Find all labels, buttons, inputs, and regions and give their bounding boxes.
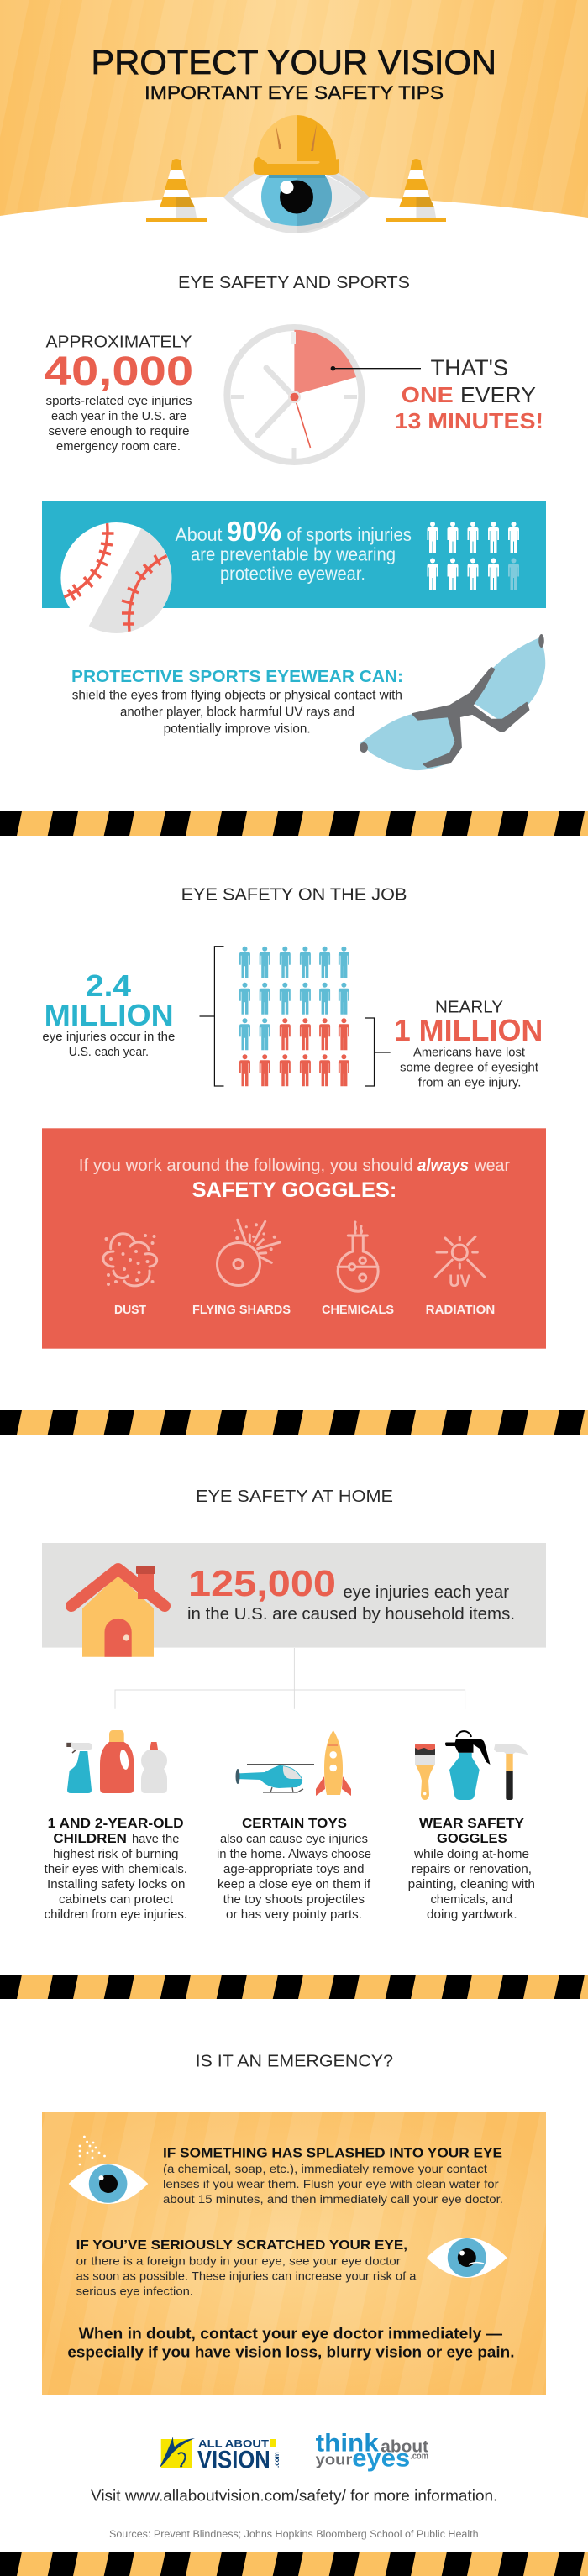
text: children: have the (132, 1833, 179, 1846)
text: about 90 percent: of sports injuries (287, 524, 412, 545)
text: splashed into eye: lenses if you wear them. Flush your eye with clean water for (163, 2177, 499, 2190)
logo: think about your eyes: eyes (352, 2445, 410, 2473)
text: goggles: repairs or renovation, (412, 1863, 532, 1876)
heading: EYE SAFETY AND SPORTS (178, 274, 410, 292)
icon: left traffic cone (146, 159, 207, 222)
bracket: right (365, 1018, 391, 1086)
text: scratched eye: as soon as possible. These injuries can increase your risk of a (76, 2269, 417, 2282)
stat: 1 million: NEARLY (435, 999, 503, 1017)
heading: SAFETY GOGGLES: (192, 1178, 396, 1202)
callout: one every 13 minutes: ONE (402, 382, 454, 407)
text: protective sports eyewear: another player, block harmful UV rays and (120, 706, 354, 720)
stat: 2.4 million: MILLION (45, 998, 174, 1032)
hazard stripe divider (0, 1410, 588, 1435)
text: goggles: painting, cleaning with (408, 1878, 535, 1891)
text: children: highest risk of burning (53, 1848, 178, 1861)
stat: 2.4 million: U.S. each year. (69, 1046, 149, 1059)
column: children (45, 1730, 187, 1922)
panel: safety goggles (42, 1128, 546, 1349)
labels: hazards: FLYING SHARDS (192, 1304, 291, 1317)
heading: IS IT AN EMERGENCY? (196, 2053, 393, 2071)
stat: 125,000: 125,000 (188, 1563, 336, 1604)
text: when in doubt (67, 2325, 514, 2360)
stat: 125,000: eye injuries each year (343, 1583, 509, 1602)
panel: 90 percent preventable (42, 501, 546, 635)
stat: 2.4 million (42, 968, 175, 1059)
text: children: their eyes with chemicals. (45, 1863, 187, 1876)
logo: think about your eyes: your (316, 2451, 352, 2468)
icon: spray bottle (445, 1731, 491, 1800)
labels: hazards: RADIATION (426, 1304, 495, 1317)
text: protective sports eyewear: shield the eyes from flying objects or physical contact with (72, 689, 402, 703)
stat: 1 million: from an eye injury. (418, 1076, 521, 1089)
logo: think about your eyes: .com (410, 2451, 428, 2461)
icon: radiation: UV (449, 1272, 470, 1291)
stat: 2.4 million: eye injuries occur in the (42, 1031, 175, 1044)
heading: EYE SAFETY ON THE JOB (181, 885, 407, 904)
icon: paint brush (415, 1744, 435, 1800)
logo: think about your eyes: about (381, 2437, 428, 2456)
column: goggles (408, 1731, 535, 1922)
icon: flying shards (217, 1220, 280, 1285)
logo: all about vision: ALL ABOUT (198, 2437, 270, 2449)
text: protective sports eyewear (71, 667, 403, 737)
icon: dust (103, 1234, 157, 1286)
text: scratched eye: IF YOU’VE SERIOUSLY SCRATCHED YOUR EYE, (76, 2238, 407, 2253)
text: sources: Sources: Prevent Blindness; Johns Hopkins Bloomberg School of Public Health (109, 2530, 479, 2540)
stat: 40,000 injuries: APPROXIMATELY (45, 333, 192, 351)
icon: right traffic cone (386, 159, 446, 222)
stat: 40,000 injuries: 40,000 (45, 349, 193, 394)
callout: one every 13 minutes: 13 MINUTES! (395, 408, 543, 433)
logo: all about vision (160, 2437, 281, 2474)
hazard stripe divider (0, 811, 588, 836)
stat: 1 million: some degree of eyesight (400, 1062, 538, 1075)
text: when in doubt: especially if you have vision loss, blurry vision or eye pain. (67, 2343, 514, 2360)
panel: 125,000 household injuries (42, 1543, 546, 1657)
icon: scratched eye (427, 2238, 507, 2278)
header banner (0, 0, 588, 233)
text: children: children from eye injuries. (45, 1908, 187, 1922)
text: toys: CERTAIN TOYS (242, 1817, 347, 1831)
chart: clock with 13 minute wedge (227, 328, 421, 462)
section: is it an emergency (42, 2053, 546, 2540)
text: splashed into eye (163, 2146, 503, 2206)
text: children: Installing safety locks on (47, 1878, 185, 1891)
icon: eye with hard hat (223, 115, 370, 233)
text: always wear: wear (474, 1157, 510, 1175)
text: children (45, 1817, 187, 1922)
text: scratched eye: serious eye infection. (76, 2284, 193, 2297)
section: eye safety and sports (42, 274, 546, 770)
text: about 90 percent (175, 516, 412, 585)
text: toys: or has very pointy parts. (226, 1908, 362, 1922)
callout: one every 13 minutes: THAT'S (430, 355, 508, 380)
title: PROTECT YOUR VISION (91, 43, 496, 81)
text: scratched eye: or there is a foreign body in your eye, see your eye doctor (76, 2253, 401, 2267)
text: toys: in the home. Always choose (217, 1848, 371, 1861)
text: splashed into eye: IF SOMETHING HAS SPLASHED INTO YOUR EYE (163, 2146, 502, 2160)
icon: baseball (60, 521, 176, 635)
stat: 40,000 injuries: each year in the U.S. are (51, 410, 186, 423)
text: toys: also can cause eye injuries (220, 1833, 368, 1846)
section: eye safety at home (42, 1487, 546, 1922)
labels: hazards (114, 1304, 495, 1317)
logo: think about your eyes (316, 2429, 428, 2473)
pictogram: nine of ten people (427, 522, 519, 590)
text: goggles: WEAR SAFETY (419, 1817, 524, 1831)
text: goggles: GOGGLES (437, 1832, 507, 1846)
text: toys (217, 1817, 371, 1922)
logo: all about vision: VISION (197, 2446, 270, 2474)
stat: 2.4 million: 2.4 (86, 968, 131, 1003)
icon: household cleaning bottles (66, 1730, 167, 1793)
pictogram: people grid (239, 947, 349, 1086)
panel: emergency advice (42, 2112, 546, 2395)
section: eye safety on the job (42, 885, 546, 1349)
connector lines (115, 1648, 465, 1709)
bracket: left (200, 947, 223, 1086)
text: splashed into eye: (a chemical, soap, etc.), immediately remove your contact (163, 2162, 487, 2175)
logo: think about your eyes: think (316, 2429, 379, 2457)
column: toys (217, 1730, 371, 1922)
hazard stripe footer (0, 2552, 588, 2576)
text: children: CHILDREN (53, 1832, 127, 1846)
text: toys: the toy shoots projectiles (223, 1893, 365, 1907)
text: about 90 percent: About (175, 524, 222, 545)
text: children: cabinets can protect (59, 1893, 173, 1907)
text: visit website: Visit www.allaboutvision.com/safety/ for more information. (91, 2487, 497, 2504)
text: toys: age-appropriate toys and (223, 1863, 365, 1876)
text: splashed into eye: about 15 minutes, and then immediately call your eye doctor. (163, 2192, 503, 2206)
stat: 40,000 injuries: severe enough to require (49, 425, 190, 438)
icon: eye with splash (69, 2136, 148, 2204)
heading: EYE SAFETY AT HOME (196, 1487, 393, 1506)
logo: all about vision: .com (273, 2452, 281, 2468)
callout: one every 13 minutes: EVERY (460, 382, 536, 407)
icon: toy rocket (316, 1730, 351, 1796)
text: goggles (408, 1817, 535, 1922)
text: always wear: If you work around the following, you should (79, 1157, 413, 1175)
icon: house (71, 1566, 165, 1657)
hazard stripe divider (0, 1975, 588, 1999)
text: toys: keep a close eye on them if (218, 1878, 371, 1891)
text: when in doubt: When in doubt, contact your eye doctor immediately — (79, 2325, 502, 2342)
stat: 125,000: in the U.S. are caused by household items. (187, 1605, 515, 1624)
stat: 125,000 (187, 1563, 515, 1624)
labels: hazards: DUST (114, 1304, 146, 1317)
stat: 1 million (394, 999, 543, 1089)
text: goggles: while doing at-home (413, 1848, 529, 1861)
text: protective sports eyewear: potentially improve vision. (164, 722, 311, 737)
text: children: 1 AND 2-YEAR-OLD (48, 1817, 184, 1831)
subtitle: IMPORTANT EYE SAFETY TIPS (144, 82, 444, 103)
callout: one every 13 minutes (395, 355, 543, 433)
text: about 90 percent: protective eyewear. (220, 564, 365, 585)
icon: radiation (435, 1236, 485, 1291)
icon: sports glasses (360, 634, 545, 770)
text: about 90 percent: 90% (227, 516, 281, 547)
icon: chemical flask (338, 1222, 378, 1291)
text: protective sports eyewear: PROTECTIVE SPORTS EYEWEAR CAN: (71, 667, 403, 686)
stat: 40,000 injuries: sports-related eye injuries (45, 395, 192, 408)
icon: hammer (494, 1744, 528, 1800)
stat: 1 million: Americans have lost (413, 1046, 525, 1059)
stat: 40,000 injuries (45, 333, 193, 454)
text: scratched eye (76, 2238, 417, 2297)
labels: hazards: CHEMICALS (322, 1304, 394, 1317)
text: always wear: always (417, 1157, 469, 1175)
stat: 40,000 injuries: emergency room care. (56, 440, 181, 454)
stat: 1 million: 1 MILLION (394, 1013, 543, 1047)
icon: toy helicopter (235, 1764, 314, 1792)
text: about 90 percent: are preventable by wearing (191, 544, 396, 565)
text: goggles: chemicals, and (430, 1893, 512, 1907)
text: goggles: doing yardwork. (427, 1908, 517, 1922)
